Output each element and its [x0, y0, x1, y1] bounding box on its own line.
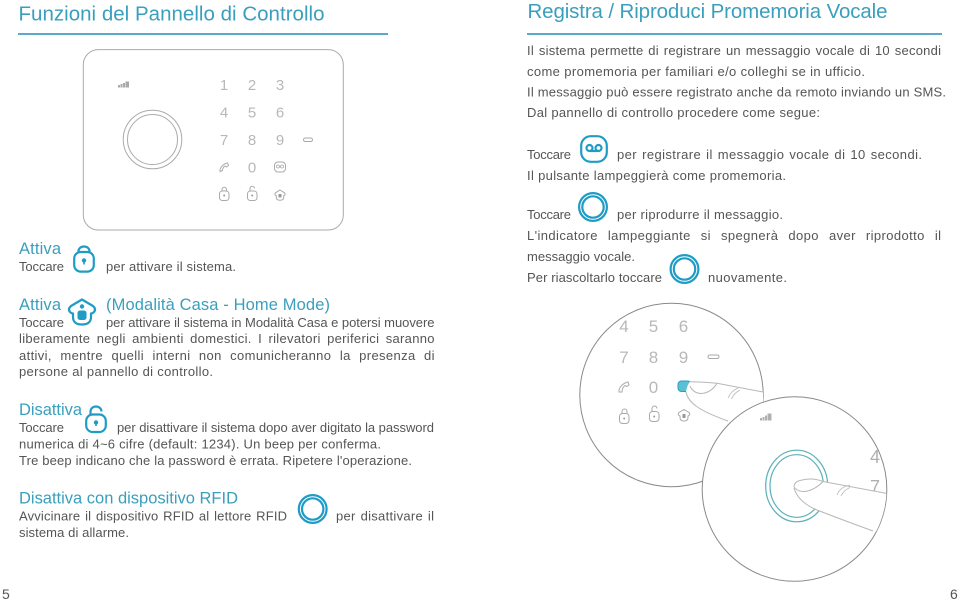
section: Disattiva con dispositivo RFID: per disattivare il	[336, 508, 434, 524]
section: play message: messaggio vocale.	[527, 249, 635, 264]
icon: ring button	[579, 193, 607, 221]
illustration: finger touching keypad and ring lenses: 9	[679, 348, 688, 367]
intro text block: Il messaggio può essere registrato anche da remoto inviando un SMS.	[527, 84, 946, 100]
section: Disattiva: per disattivare il sistema dopo aver digitato la password	[117, 420, 434, 435]
illustration: finger touching keypad and ring lenses: 6	[679, 317, 688, 336]
illustration: finger touching keypad and ring lenses: 4	[870, 447, 880, 467]
icon: closed padlock	[74, 246, 94, 272]
section: Disattiva: numerica di 4~6 cifre (default: 1234). Un beep per conferma.	[19, 436, 381, 452]
section: Attiva Modalità Casa: Attiva	[19, 296, 62, 314]
control panel illustration: 3	[276, 77, 284, 94]
intro text block: Dal pannello di controllo procedere come segue:	[527, 105, 820, 120]
section: Disattiva con dispositivo RFID: Disattiva con dispositivo RFID	[19, 490, 238, 508]
illustration: finger touching keypad and ring lenses: 5	[649, 317, 658, 336]
control panel illustration: 8	[248, 132, 256, 149]
section: Disattiva: Disattiva	[19, 401, 83, 419]
section: Attiva Modalità Casa: per attivare il sistema in Modalità Casa e potersi muovere	[106, 315, 434, 330]
section: play message: Per riascoltarlo toccare	[527, 270, 662, 285]
icon: open padlock	[86, 406, 106, 432]
illustration: finger touching keypad and ring lenses: 7	[870, 477, 880, 497]
control panel illustration: 5	[248, 104, 256, 122]
icon: RFID ring	[299, 495, 327, 523]
section: Attiva Modalità Casa: liberamente negli ambienti domestici. I rilevatori periferici saranno	[19, 331, 434, 346]
title: Registra / Riproduci Promemoria Vocale: Registra / Riproduci Promemoria Vocale	[528, 0, 888, 23]
section: Disattiva: Tre beep indicano che la password è errata. Ripetere l'operazione.	[19, 453, 412, 468]
section: play message	[527, 192, 941, 285]
intro text block: Il sistema permette di registrare un messaggio vocale di 10 secondi	[527, 43, 941, 58]
section: record message	[527, 135, 922, 183]
control panel illustration: 4	[220, 104, 228, 122]
control panel illustration: 2	[248, 77, 256, 94]
control panel illustration: 9	[276, 132, 284, 149]
section: Attiva	[19, 240, 236, 274]
title: Funzioni del Pannello di Controllo: Funzioni del Pannello di Controllo	[18, 3, 324, 26]
section: Attiva Modalità Casa: Toccare	[19, 315, 64, 330]
illustration: finger touching keypad and ring lenses: 8	[649, 348, 658, 367]
illustration: finger touching keypad and ring lenses	[579, 302, 888, 582]
section: play message: per riprodurre il messaggio.	[617, 207, 783, 222]
section: Attiva Modalità Casa: (Modalità Casa - Home Mode)	[106, 296, 330, 314]
section: Attiva: per attivare il sistema.	[106, 259, 236, 274]
section: Attiva Modalità Casa	[19, 296, 435, 379]
control panel illustration	[82, 49, 344, 230]
section: play message: nuovamente.	[708, 270, 787, 285]
section: Disattiva con dispositivo RFID	[19, 490, 434, 540]
intro text block	[527, 43, 946, 120]
icon: voice message	[581, 136, 607, 162]
section: Disattiva con dispositivo RFID: sistema di allarme.	[19, 525, 129, 540]
illustration: finger touching keypad and ring lenses: 4	[619, 317, 629, 336]
control panel illustration: 7	[220, 132, 228, 149]
illustration: finger touching keypad and ring lenses: 0	[649, 378, 658, 397]
section: Disattiva con dispositivo RFID: Avvicinare il dispositivo RFID al lettore RFID	[19, 508, 287, 524]
section: Attiva: Toccare	[19, 259, 64, 274]
section: record message: per registrare il messaggio vocale di 10 secondi.	[617, 147, 922, 162]
section: Attiva Modalità Casa: attivi, mentre quelli interni non comunicheranno la presenza di	[19, 348, 435, 363]
illustration: finger touching keypad and ring lenses: 7	[619, 348, 629, 367]
section: Disattiva	[19, 401, 434, 468]
control panel illustration: 6	[276, 104, 284, 122]
section: record message: Il pulsante lampeggierà come promemoria.	[527, 168, 786, 183]
section: play message: L'indicatore lampeggiante si spegnerà dopo aver riprodotto il	[527, 228, 941, 243]
section: Attiva Modalità Casa: persone al pannello di controllo.	[19, 364, 213, 379]
icon: ring button again	[671, 255, 698, 283]
control panel illustration: 1	[220, 77, 228, 94]
section: play message: Toccare	[527, 207, 571, 222]
intro text block: come promemoria per familiari e/o colleghi se in ufficio.	[527, 64, 865, 79]
section: record message: Toccare	[527, 147, 571, 162]
icon: home mode	[69, 300, 95, 324]
control panel illustration: 0	[248, 160, 256, 176]
section: Attiva: Attiva	[19, 240, 62, 258]
section: Disattiva: Toccare	[19, 420, 64, 435]
